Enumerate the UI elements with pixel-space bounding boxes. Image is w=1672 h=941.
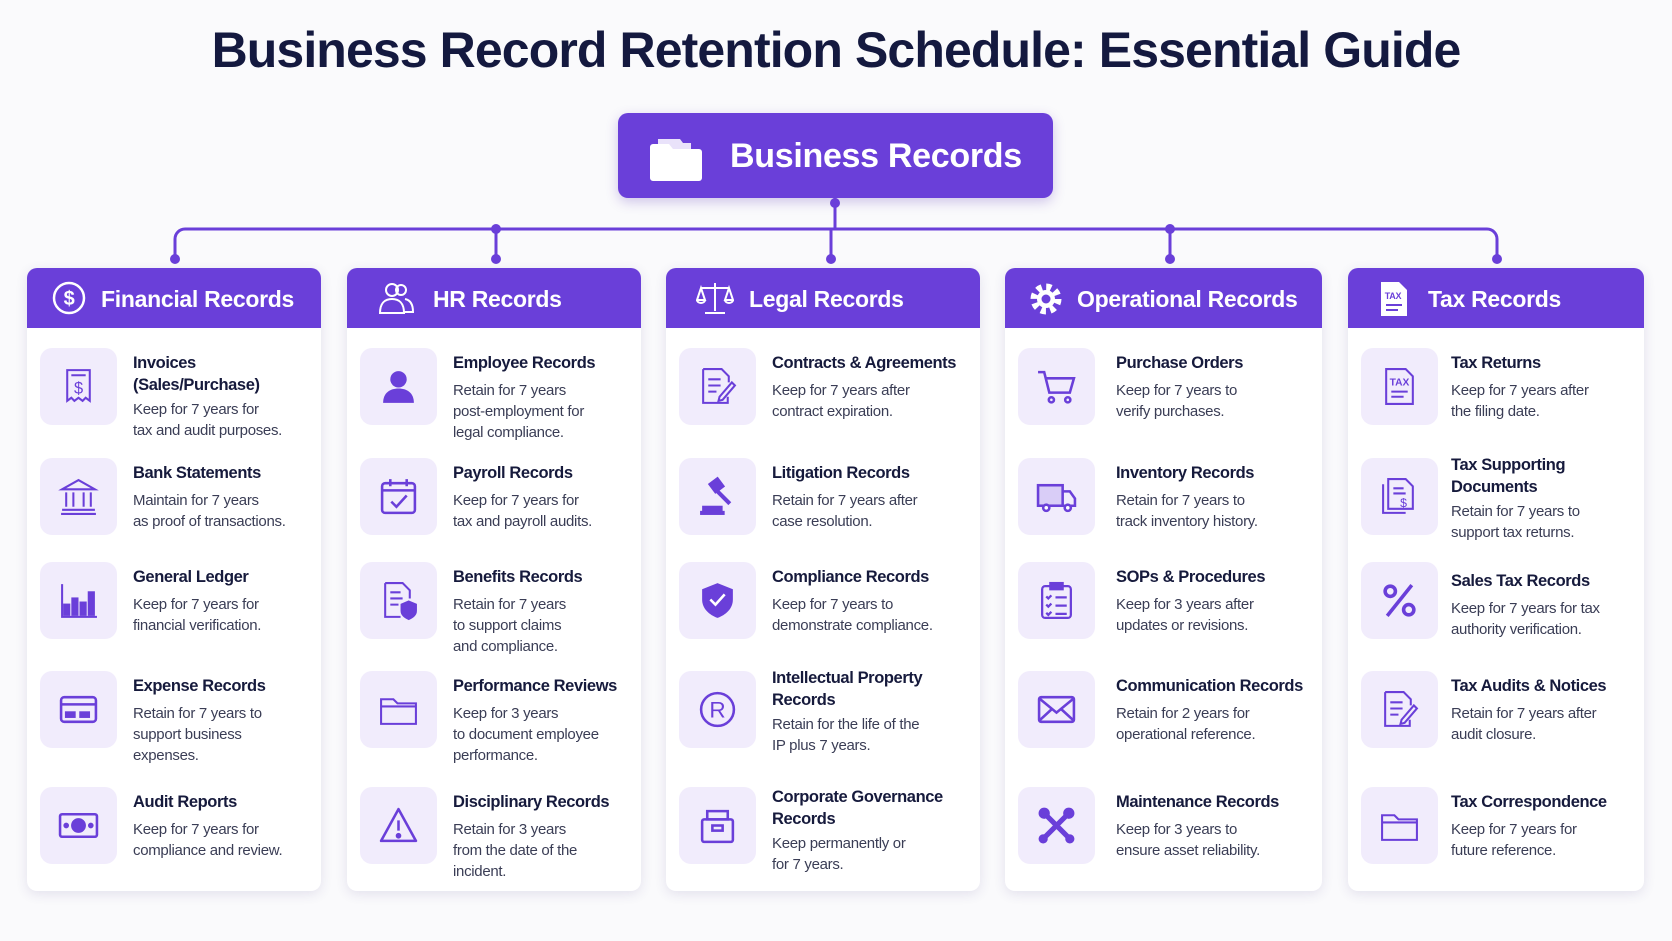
connector lines bbox=[170, 198, 1502, 264]
panel: HR records bbox=[347, 268, 641, 891]
item: tax supporting documents: Retain for 7 years to bbox=[1451, 503, 1580, 520]
item: SOPs: Keep for 3 years after bbox=[1116, 596, 1254, 613]
panel: financial records: tax and audit purposes. bbox=[133, 422, 282, 439]
item: bank statements: Maintain for 7 years bbox=[133, 492, 259, 509]
header: legal: Legal Records bbox=[749, 286, 904, 312]
item: purchase orders bbox=[1018, 348, 1243, 425]
item: sales tax: authority verification. bbox=[1451, 621, 1582, 638]
item: benefits: Benefits Records bbox=[453, 568, 582, 586]
item: tax returns bbox=[1361, 348, 1589, 425]
item: communication bbox=[1018, 671, 1303, 748]
item: invoices: Invoices bbox=[133, 354, 196, 372]
item: inventory bbox=[1018, 458, 1258, 535]
item: tax correspondence bbox=[1361, 787, 1607, 864]
item: intellectual property: IP plus 7 years. bbox=[772, 737, 870, 754]
panel: HR records: legal compliance. bbox=[453, 424, 564, 441]
item: tax audits: Retain for 7 years after bbox=[1451, 705, 1596, 722]
item: contracts bbox=[679, 348, 956, 425]
item: sales tax bbox=[1361, 562, 1600, 639]
panel: operational records bbox=[1005, 268, 1322, 891]
item: audit reports: Keep for 7 years for bbox=[133, 821, 259, 838]
item: bank statements: as proof of transactions. bbox=[133, 513, 286, 530]
item: expense records: Retain for 7 years to bbox=[133, 705, 262, 722]
item: contracts: Keep for 7 years after bbox=[772, 382, 910, 399]
item: compliance: Compliance Records bbox=[772, 568, 929, 586]
item: employee records: Retain for 7 years bbox=[453, 382, 566, 399]
item: bank statements: Bank Statements bbox=[133, 464, 261, 482]
item: intellectual property: Records bbox=[772, 691, 835, 709]
panel: legal records bbox=[666, 268, 980, 891]
item: invoices bbox=[40, 348, 282, 439]
item: compliance: demonstrate compliance. bbox=[772, 617, 933, 634]
item: tax supporting documents: Tax Supporting bbox=[1451, 456, 1565, 474]
item: sales tax: Keep for 7 years for tax bbox=[1451, 600, 1600, 617]
hub: business records: Business Records bbox=[730, 137, 1022, 175]
header: financial: Financial Records bbox=[101, 286, 294, 312]
item: payroll: tax and payroll audits. bbox=[453, 513, 592, 530]
item: litigation: case resolution. bbox=[772, 513, 872, 530]
item: performance reviews: Performance Reviews bbox=[453, 677, 617, 695]
panel: HR records: and compliance. bbox=[453, 638, 558, 655]
item: tax supporting documents: Documents bbox=[1451, 478, 1537, 496]
item: communication: operational reference. bbox=[1116, 726, 1255, 743]
item: contracts: contract expiration. bbox=[772, 403, 893, 420]
item: maintenance: ensure asset reliability. bbox=[1116, 842, 1260, 859]
item: tax correspondence: Keep for 7 years for bbox=[1451, 821, 1577, 838]
item: maintenance: Keep for 3 years to bbox=[1116, 821, 1237, 838]
item: performance reviews: Keep for 3 years bbox=[453, 705, 558, 722]
item: audit reports: compliance and review. bbox=[133, 842, 282, 859]
item: disciplinary: Disciplinary Records bbox=[453, 793, 609, 811]
item: intellectual property: Retain for the life of the bbox=[772, 716, 919, 733]
item: corporate governance bbox=[679, 787, 943, 873]
item: expense records: support business bbox=[133, 726, 242, 743]
item: corporate governance: Records bbox=[772, 810, 835, 828]
item: corporate governance: for 7 years. bbox=[772, 856, 843, 873]
header: financial: $ bbox=[64, 288, 75, 310]
panel: HR records: incident. bbox=[453, 863, 506, 880]
hub: business records bbox=[618, 113, 1053, 198]
item: invoices: $ bbox=[74, 380, 83, 398]
header: tax: TAX bbox=[1385, 291, 1402, 301]
item: general ledger bbox=[40, 562, 261, 639]
item: benefits bbox=[360, 562, 582, 655]
item: payroll bbox=[360, 458, 592, 535]
item: tax supporting documents: support tax returns. bbox=[1451, 524, 1574, 541]
header: HR: HR Records bbox=[433, 286, 562, 312]
item: SOPs: SOPs & Procedures bbox=[1116, 568, 1265, 586]
item: tax audits bbox=[1361, 671, 1606, 748]
item: performance reviews: to document employee bbox=[453, 726, 599, 743]
item: tax supporting documents: $ bbox=[1400, 496, 1407, 510]
panel: financial records bbox=[27, 268, 321, 891]
item: SOPs: updates or revisions. bbox=[1116, 617, 1248, 634]
item: intellectual property: Intellectual Property bbox=[772, 669, 922, 687]
item: expense records: Expense Records bbox=[133, 677, 265, 695]
panel: financial records: expenses. bbox=[133, 747, 199, 764]
item: performance reviews bbox=[360, 671, 617, 764]
item: general ledger: Keep for 7 years for bbox=[133, 596, 259, 613]
item: intellectual property: R bbox=[709, 698, 726, 723]
item: tax returns: Tax Returns bbox=[1451, 354, 1541, 372]
item: benefits: to support claims bbox=[453, 617, 561, 634]
item: audit reports bbox=[40, 787, 282, 864]
item: disciplinary bbox=[360, 787, 609, 880]
item: audit reports: Audit Reports bbox=[133, 793, 237, 811]
item: general ledger: financial verification. bbox=[133, 617, 261, 634]
item: corporate governance: Keep permanently or bbox=[772, 835, 906, 852]
item: bank statements bbox=[40, 458, 286, 535]
item: employee records: post-employment for bbox=[453, 403, 584, 420]
item: litigation: Retain for 7 years after bbox=[772, 492, 917, 509]
item: tax returns: Keep for 7 years after bbox=[1451, 382, 1589, 399]
item: tax returns: TAX bbox=[1390, 377, 1410, 388]
item: disciplinary: Retain for 3 years bbox=[453, 821, 566, 838]
item: tax supporting documents bbox=[1361, 456, 1580, 541]
item: communication: Communication Records bbox=[1116, 677, 1303, 695]
item: sales tax: Sales Tax Records bbox=[1451, 572, 1590, 590]
item: general ledger: General Ledger bbox=[133, 568, 248, 586]
header: operational: Operational Records bbox=[1077, 286, 1298, 312]
item: inventory: Inventory Records bbox=[1116, 464, 1254, 482]
header: legal bbox=[666, 268, 980, 328]
item: corporate governance: Corporate Governance bbox=[772, 788, 943, 806]
item: purchase orders: Keep for 7 years to bbox=[1116, 382, 1237, 399]
header: operational bbox=[1005, 268, 1322, 328]
item: compliance bbox=[679, 562, 933, 639]
item: purchase orders: Purchase Orders bbox=[1116, 354, 1243, 372]
item: communication: Retain for 2 years for bbox=[1116, 705, 1249, 722]
title: Business Record Retention Schedule: Essential Guide bbox=[212, 22, 1460, 78]
item: litigation: Litigation Records bbox=[772, 464, 910, 482]
panel: HR records: performance. bbox=[453, 747, 538, 764]
item: benefits: Retain for 7 years bbox=[453, 596, 566, 613]
item: employee records bbox=[360, 348, 595, 441]
item: inventory: Retain for 7 years to bbox=[1116, 492, 1245, 509]
header: tax: Tax Records bbox=[1428, 286, 1561, 312]
header: tax bbox=[1348, 268, 1644, 328]
item: disciplinary: from the date of the bbox=[453, 842, 577, 859]
icon: folder bbox=[650, 139, 702, 181]
item: tax audits: audit closure. bbox=[1451, 726, 1536, 743]
item: maintenance: Maintenance Records bbox=[1116, 793, 1279, 811]
item: invoices: (Sales/Purchase) bbox=[133, 376, 260, 394]
item: tax correspondence: future reference. bbox=[1451, 842, 1556, 859]
item: employee records: Employee Records bbox=[453, 354, 595, 372]
item: payroll: Payroll Records bbox=[453, 464, 573, 482]
item: intellectual property bbox=[679, 669, 922, 754]
item: purchase orders: verify purchases. bbox=[1116, 403, 1224, 420]
item: litigation bbox=[679, 458, 918, 535]
item: compliance: Keep for 7 years to bbox=[772, 596, 893, 613]
item: expense records bbox=[40, 671, 266, 764]
item: tax correspondence: Tax Correspondence bbox=[1451, 793, 1607, 811]
item: invoices: Keep for 7 years for bbox=[133, 401, 259, 418]
item: inventory: track inventory history. bbox=[1116, 513, 1258, 530]
item: tax audits: Tax Audits & Notices bbox=[1451, 677, 1606, 695]
item: payroll: Keep for 7 years for bbox=[453, 492, 579, 509]
item: SOPs bbox=[1018, 562, 1265, 639]
header: financial bbox=[27, 268, 321, 328]
header: HR bbox=[347, 268, 641, 328]
item: contracts: Contracts & Agreements bbox=[772, 354, 956, 372]
item: tax returns: the filing date. bbox=[1451, 403, 1540, 420]
item: maintenance bbox=[1018, 787, 1279, 864]
panel: tax records bbox=[1348, 268, 1644, 891]
